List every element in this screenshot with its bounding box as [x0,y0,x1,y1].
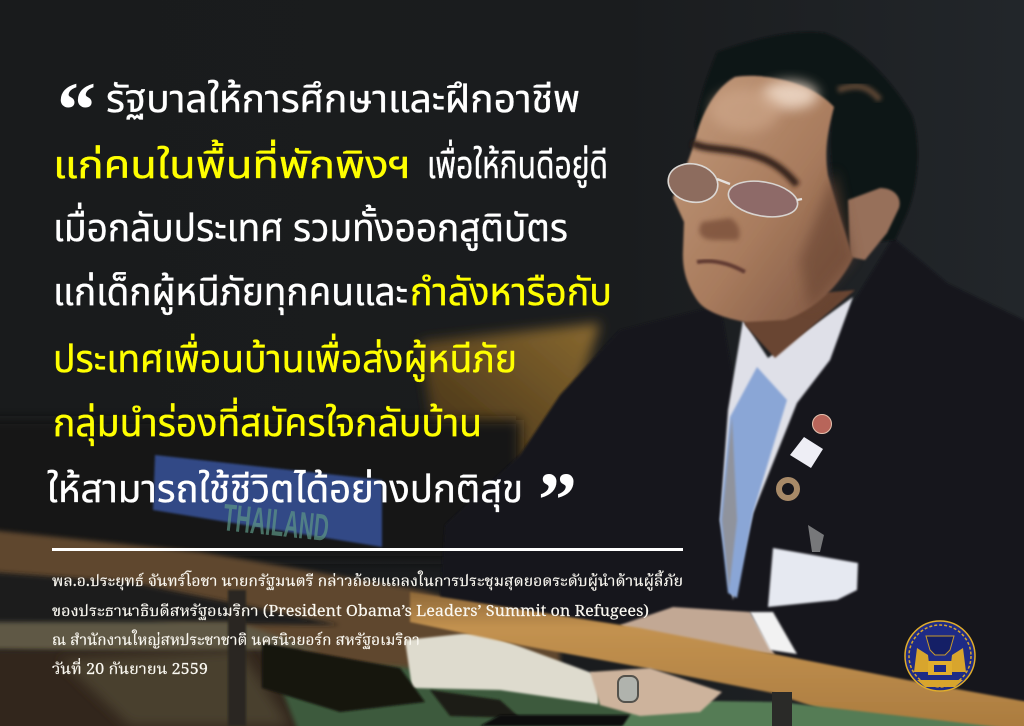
quote mark: closing: ” [538,456,577,543]
caption line 4: วันที่ 20 กันยายน 2559 [52,658,208,683]
lower desk [0,650,300,726]
quote mark: opening: “ [57,66,96,153]
line 4: แก่เด็กผู้หนีภัยทุกคนและ [53,266,408,323]
forehead highlight [762,81,818,109]
line 1: รัฐบาลให้การศึกษาและฝึกอาชีพ [106,73,580,130]
upper hand and cuff [620,607,797,655]
green desk [270,660,640,726]
line 5 highlight: ประเทศเพื่อนบ้านเพื่อส่งผู้หนีภัย [53,333,517,390]
ear [848,188,900,260]
dark band [0,572,340,625]
mouth [697,261,745,272]
glasses [665,159,802,222]
badge [768,548,858,607]
caption [52,570,683,683]
badge clip [808,525,824,552]
line 2 highlight: แก่คนในพื้นที่พักพิงฯ [53,139,411,196]
nose [699,218,740,240]
pin: red [812,414,832,434]
pin: ring [779,480,797,498]
caption line 1: พล.อ.ประยุทธ์ จันทร์โอชา นายกรัฐมนตรี กล่าวถ้อยแถลงในการประชุมสุดยอดระดับผู้นำด้านผู้ลี้ภัย [52,570,683,595]
orange panel [420,323,600,475]
suit [440,238,1024,705]
face [673,76,853,322]
book [405,632,600,704]
dark console [262,643,425,712]
rail [410,592,1024,726]
pin: white square [790,437,823,468]
caption line 3: ณ สำนักงานใหญ่สหประชาชาติ นครนิวยอร์ก สหรัฐอเมริกา [52,629,420,654]
seal emblem [926,636,954,655]
tie [720,367,787,598]
cheek shade [800,170,853,310]
main quote text [47,73,612,520]
eyebrows [692,143,797,185]
rail post [772,692,792,726]
line 4 highlight: กำลังหารือกับ [410,266,612,323]
lower hand with ring [590,668,722,716]
divider rule [52,548,683,551]
line 3: เมื่อกลับประเทศ รวมทั้งออกสูติบัตร [53,202,568,259]
shirt [720,297,853,600]
bench [0,530,560,700]
neck [740,290,855,358]
microphone post [228,590,246,726]
figure: man in dark suit [440,32,1024,705]
line 2: เพื่อให้กินดีอยู่ดี [427,139,608,196]
line 7: ให้สามารถใช้ชีวิตได้อย่างปกติสุข [47,463,523,520]
lower dark band [0,420,520,560]
caption line 2: ของประธานาธิบดีสหรัฐอเมริกา (President Obama’s Leaders’ Summit on Refugees) [52,601,649,625]
rail green surface [620,700,1024,726]
desk scene behind the text [0,323,640,726]
placard [153,455,382,550]
light olive desk [0,622,320,655]
hair [695,32,918,245]
placard: THAILAND [221,497,331,550]
line 6 highlight: กลุ่มนำร่องที่สมัครใจกลับบ้าน [53,397,482,454]
seal [905,621,975,691]
